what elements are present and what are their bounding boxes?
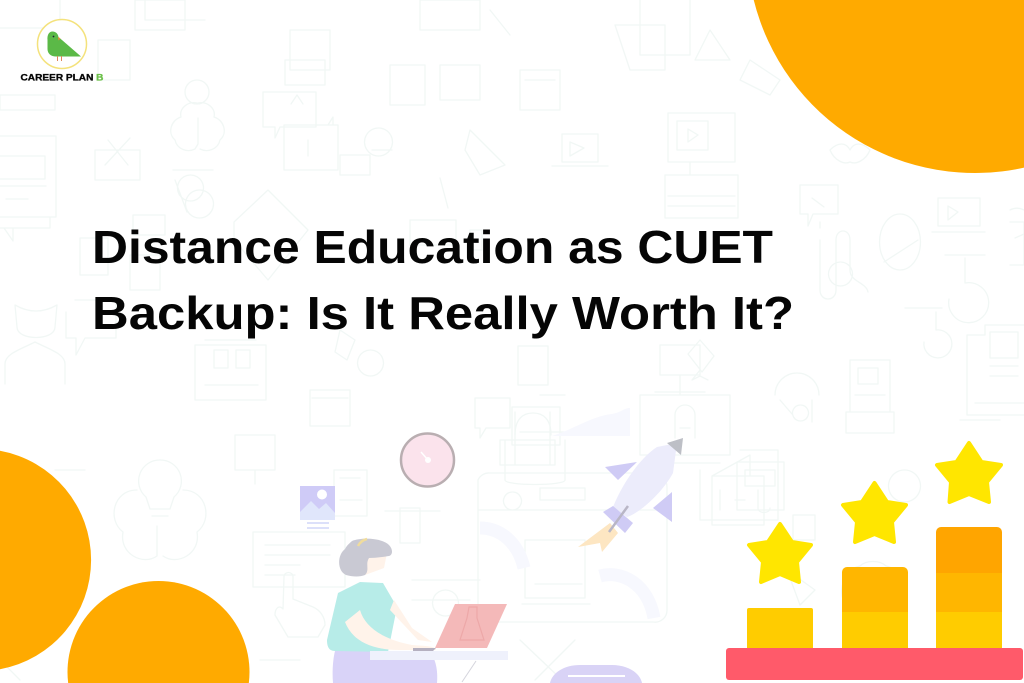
top right orange circle bbox=[754, 0, 1024, 173]
bar 3 bbox=[936, 527, 1002, 648]
rocket bbox=[578, 438, 683, 552]
bar 2 bbox=[842, 567, 908, 648]
purple pill bbox=[550, 665, 642, 683]
laptop bbox=[413, 604, 507, 651]
clock icon bbox=[401, 434, 454, 486]
bottom orange circle bbox=[68, 581, 250, 683]
desk bbox=[370, 651, 508, 660]
star 2 bbox=[843, 483, 906, 542]
logo: Career Plan B bbox=[20, 20, 104, 84]
left orange circle bbox=[0, 451, 91, 669]
desk leg bbox=[462, 661, 476, 682]
picture icon bbox=[300, 486, 335, 528]
pale chart shape bbox=[552, 408, 630, 436]
title line 2: Backup: Is It Really Worth It? bbox=[92, 287, 794, 339]
title bbox=[92, 221, 794, 339]
logo bird bbox=[47, 32, 81, 61]
title line 1: Distance Education as CUET bbox=[92, 221, 773, 273]
logo wordmark: CAREER PLAN B bbox=[20, 72, 104, 84]
logo ring bbox=[38, 20, 86, 68]
star 1 bbox=[749, 524, 811, 582]
base bbox=[726, 648, 1023, 680]
faint gradient arcs bbox=[480, 528, 654, 618]
rating bar chart with stars bbox=[726, 443, 1023, 680]
illustration: woman at laptop with rocket bbox=[300, 408, 683, 683]
woman bbox=[327, 539, 437, 683]
star 3 bbox=[937, 443, 1001, 502]
bar 1 bbox=[747, 608, 813, 648]
